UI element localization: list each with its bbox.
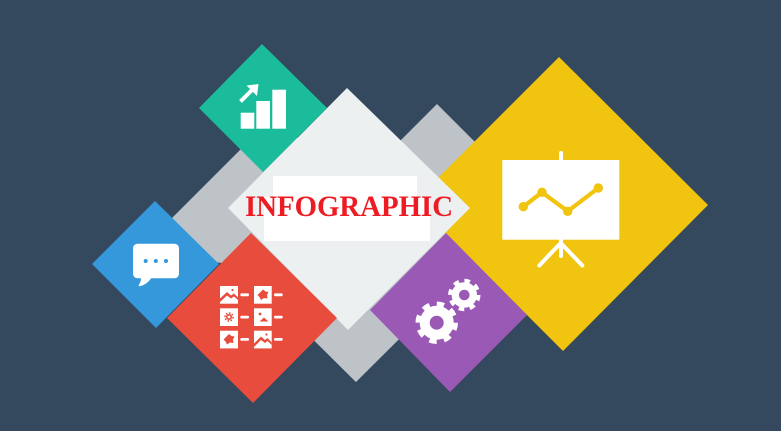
title backing block	[264, 176, 430, 241]
panel: blue diamond	[92, 201, 219, 328]
icon: growth bar chart with arrow	[240, 84, 286, 129]
panel: white centre diamond	[228, 88, 470, 330]
icon: picture list grid	[220, 286, 283, 348]
icon: presentation board with line chart	[502, 153, 619, 266]
panel: green diamond	[199, 44, 327, 172]
title: INFOGRAPHIC	[245, 190, 453, 223]
icon: gears	[418, 281, 478, 341]
icon: speech bubble	[133, 244, 179, 286]
grey back diamonds	[170, 104, 536, 382]
panel: red diamond	[167, 233, 337, 403]
panel: purple diamond	[370, 233, 527, 392]
panel: yellow diamond	[414, 57, 708, 351]
